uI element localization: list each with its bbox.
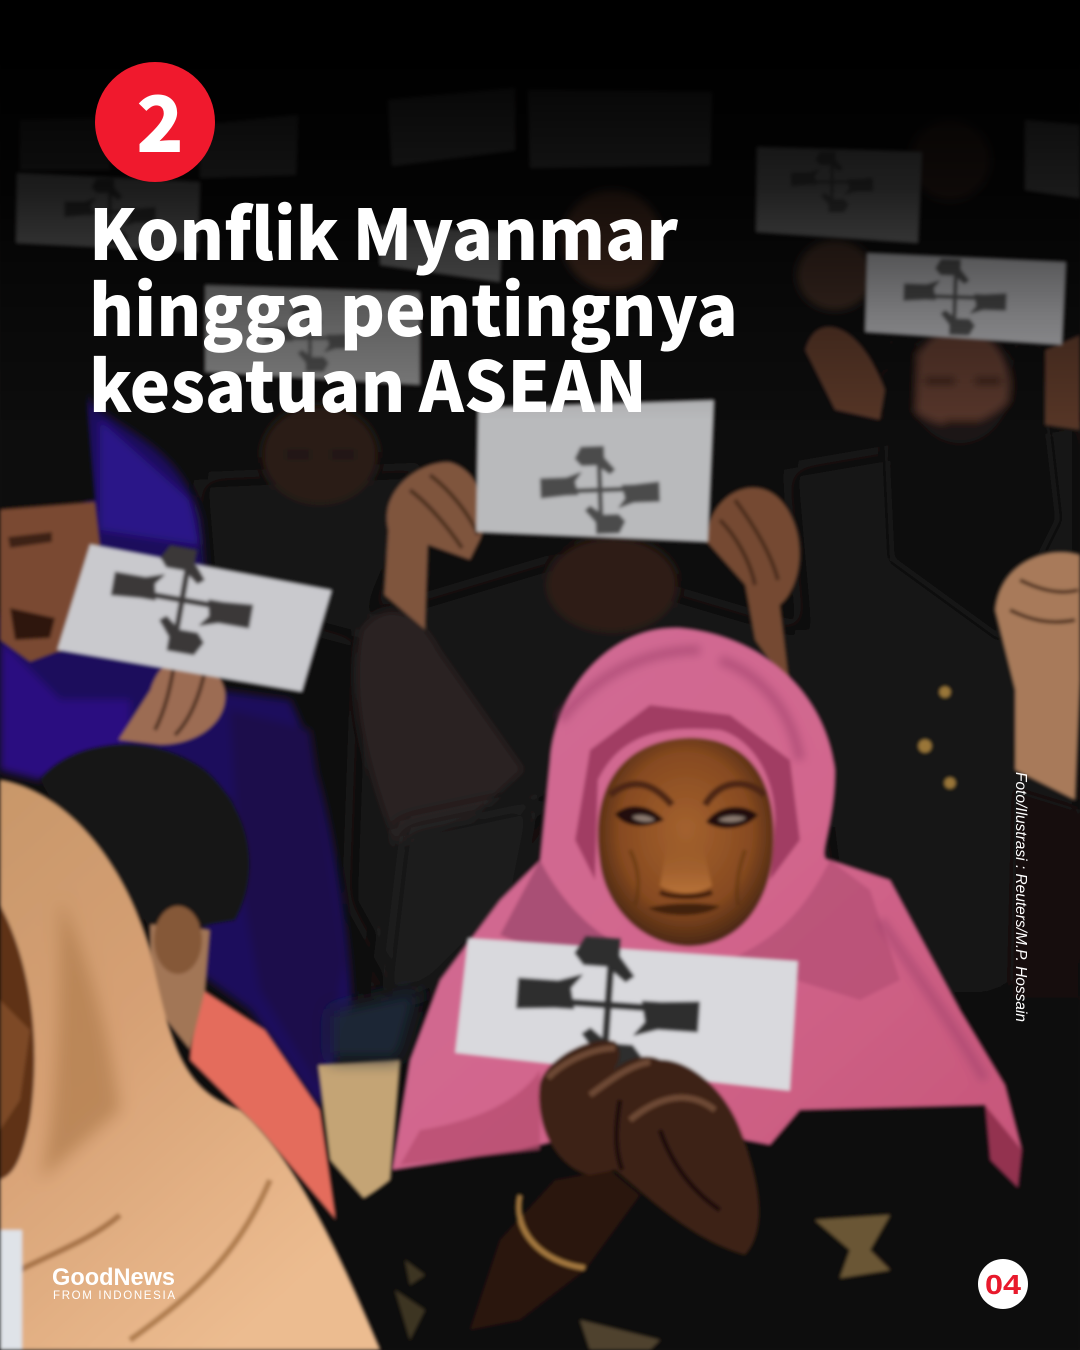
crowd: upper faces	[262, 120, 1060, 640]
card emblems	[64, 152, 1008, 1078]
salmon cloth	[190, 985, 336, 1220]
main woman pink hijab	[392, 628, 1022, 1188]
peach hijab bottom-left	[0, 780, 380, 1350]
page number badge	[978, 1259, 1028, 1309]
dark figure lower middle	[380, 800, 540, 1000]
purple hijab left	[0, 395, 352, 1110]
ground	[318, 1060, 400, 1200]
protest card main	[455, 938, 798, 1091]
right arm dark shading	[1010, 790, 1080, 1000]
page number badge: 04	[985, 1269, 1021, 1300]
title: kesatuan ASEAN	[89, 332, 647, 433]
protest cards, dim upper row	[16, 88, 1080, 385]
protest card left	[57, 544, 332, 692]
raised hands holding cards	[118, 327, 1080, 800]
main woman hands	[470, 1041, 759, 1330]
title: hingga pentingnya	[89, 256, 738, 357]
main woman black robe	[336, 960, 1080, 1350]
photo credit: Foto/Ilustrasi : Reuters/M.P. Hossain	[1012, 772, 1029, 1022]
left woman face and black headscarf	[0, 385, 100, 662]
badge: number 2: 2	[136, 63, 184, 175]
logo: GoodNews from Indonesia: GoodNews	[52, 1264, 175, 1291]
title	[89, 180, 738, 433]
top dark gradient overlay	[0, 0, 1080, 420]
brocade sleeve	[355, 610, 525, 845]
main woman face	[598, 738, 773, 946]
title: Konflik Myanmar	[89, 180, 678, 281]
protest card centre	[476, 400, 714, 542]
badge: number 2	[95, 62, 215, 182]
crowd: dark robed women	[200, 420, 1080, 1000]
logo: GoodNews from Indonesia: FROM INDONESIA	[53, 1290, 175, 1302]
child head with neck	[40, 745, 249, 1050]
